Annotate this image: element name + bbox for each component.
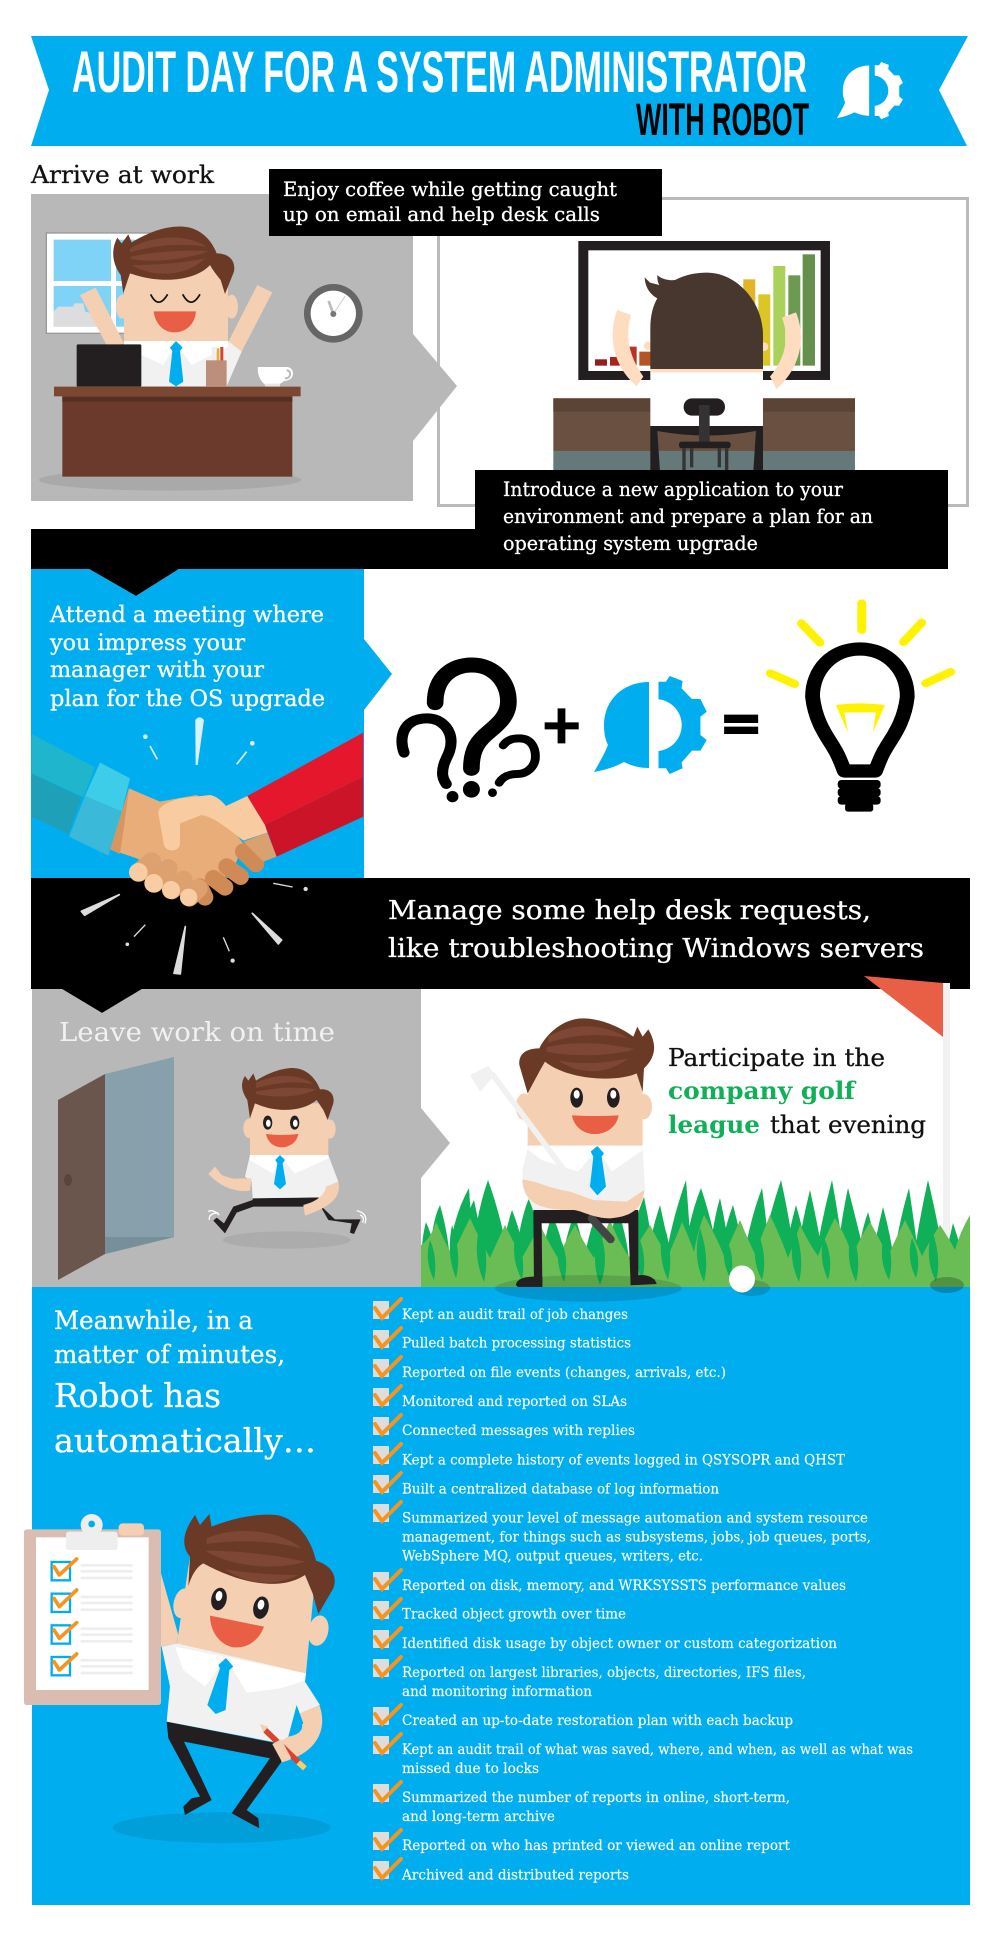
panel: coffee frame xyxy=(438,198,968,506)
item xyxy=(373,1570,846,1594)
heading: arrive at work: Arrive at work xyxy=(30,161,214,189)
text: meanwhile robot has automatically: Robot has xyxy=(54,1376,221,1415)
item: Created an up-to-date restoration plan with each backup xyxy=(402,1713,793,1729)
text: participate in the company golf league: league xyxy=(668,1110,760,1139)
callout: introduce a new application: Introduce a new application to your xyxy=(503,478,844,501)
band: manage help desk requests: like troubleshooting Windows servers xyxy=(388,934,924,964)
checklist xyxy=(373,1299,913,1883)
callout: introduce a new application: environment and prepare a plan for an xyxy=(503,505,873,528)
item: Reported on largest libraries, objects, directories, IFS files, xyxy=(402,1665,806,1681)
illustration: man with clipboard xyxy=(24,1514,335,1843)
illustration: running man xyxy=(208,1068,366,1249)
item: Kept an audit trail of what was saved, where, and when, as well as what was xyxy=(402,1742,913,1758)
text: attend a meeting: plan for the OS upgrade xyxy=(50,687,325,712)
sparkles xyxy=(143,717,255,765)
golf ball xyxy=(729,1266,770,1296)
panel: golf background xyxy=(421,989,970,1287)
panel: arrive at work xyxy=(31,194,457,501)
item: Summarized the number of reports in online, short-term, xyxy=(402,1790,790,1806)
item: and monitoring information xyxy=(402,1684,592,1700)
icon: robot logo xyxy=(837,62,903,119)
item: and long-term archive xyxy=(402,1809,555,1825)
item xyxy=(373,1705,793,1729)
text: participate in the company golf league: that evening xyxy=(770,1111,926,1139)
callout: introduce a new application xyxy=(31,470,948,596)
item: missed due to locks xyxy=(402,1761,539,1777)
item xyxy=(373,1299,628,1323)
text: meanwhile robot has automatically: matter of minutes, xyxy=(54,1340,285,1369)
equals sign xyxy=(724,715,758,734)
item xyxy=(373,1734,913,1777)
text: attend a meeting: manager with your xyxy=(50,658,264,683)
panel: leave work on time xyxy=(32,989,450,1287)
text: attend a meeting: you impress your xyxy=(49,631,245,656)
text: attend a meeting xyxy=(49,603,325,712)
golf club xyxy=(470,1066,577,1187)
callout: enjoy coffee xyxy=(269,169,662,236)
text: participate in the company golf league: Participate in the xyxy=(668,1044,885,1072)
item: management, for things such as subsystems, jobs, job queues, ports, xyxy=(402,1530,871,1546)
item xyxy=(373,1386,627,1410)
callout: enjoy coffee: Enjoy coffee while getting caught xyxy=(283,178,617,201)
item: Kept a complete history of events logged in QSYSOPR and QHST xyxy=(402,1452,846,1468)
item xyxy=(373,1473,719,1498)
subtitle: WITH ROBOT xyxy=(636,94,809,145)
illustration: man at desk xyxy=(39,227,363,491)
item xyxy=(373,1415,635,1439)
panel: robot has automatically xyxy=(32,1287,970,1905)
item: Identified disk usage by object owner or custom categorization xyxy=(402,1636,837,1652)
item xyxy=(373,1859,629,1883)
item: Summarized your level of message automation and system resource xyxy=(402,1511,868,1527)
band: manage help desk requests: Manage some help desk requests, xyxy=(388,896,871,926)
callout: introduce a new application: operating system upgrade xyxy=(503,532,758,555)
golf flag base shadow xyxy=(930,1277,964,1293)
item xyxy=(373,1782,790,1825)
illustration: golfing man xyxy=(470,1018,682,1302)
item: Reported on file events (changes, arrivals, etc.) xyxy=(402,1365,726,1381)
item xyxy=(373,1599,626,1623)
item: Pulled batch processing statistics xyxy=(402,1336,631,1352)
item xyxy=(373,1830,790,1854)
text: participate in the company golf league: company golf xyxy=(668,1076,857,1105)
item: WebSphere MQ, output queues, writers, etc. xyxy=(402,1548,703,1564)
text: meanwhile robot has automatically: automatically… xyxy=(54,1421,316,1460)
text: participate in the company golf league xyxy=(668,1044,926,1139)
plus sign xyxy=(545,708,579,743)
icon: light bulb xyxy=(770,603,951,812)
heading: leave work on time: Leave work on time xyxy=(59,1018,335,1048)
text: attend a meeting: Attend a meeting where xyxy=(49,603,324,628)
icon: question marks xyxy=(402,665,535,802)
text: meanwhile robot has automatically: Meanwhile, in a xyxy=(54,1306,253,1335)
band: manage help desk requests xyxy=(31,878,970,1013)
item: Archived and distributed reports xyxy=(401,1867,629,1883)
illustration: grass xyxy=(421,1180,970,1287)
item: Reported on disk, memory, and WRKSYSSTS performance values xyxy=(402,1578,846,1594)
pencil xyxy=(260,1724,305,1768)
item: Tracked object growth over time xyxy=(402,1607,626,1623)
callout: enjoy coffee: up on email and help desk calls xyxy=(283,203,600,226)
illustration: handshake xyxy=(32,717,363,974)
illustration: flag and pole xyxy=(864,976,950,1276)
header banner xyxy=(31,36,968,146)
item xyxy=(373,1444,846,1468)
icon: wall clock xyxy=(304,284,363,343)
item: Reported on who has printed or viewed an online report xyxy=(402,1838,790,1854)
item xyxy=(373,1328,631,1352)
equation: questions plus robot equals idea xyxy=(402,603,951,812)
item: Built a centralized database of log information xyxy=(402,1482,719,1498)
item: Connected messages with replies xyxy=(402,1423,635,1439)
clipboard xyxy=(24,1514,161,1705)
item: Monitored and reported on SLAs xyxy=(402,1394,627,1410)
icon: robot logo xyxy=(594,676,707,774)
item xyxy=(373,1502,871,1564)
item: Kept an audit trail of job changes xyxy=(402,1307,628,1323)
item xyxy=(373,1357,726,1381)
illustration: man at monitor, seen from behind xyxy=(553,241,855,471)
item xyxy=(373,1657,806,1700)
text: meanwhile robot has automatically xyxy=(54,1306,316,1460)
panel: attend a meeting xyxy=(31,569,392,878)
illustration: open door xyxy=(58,1057,174,1280)
item xyxy=(373,1628,837,1652)
